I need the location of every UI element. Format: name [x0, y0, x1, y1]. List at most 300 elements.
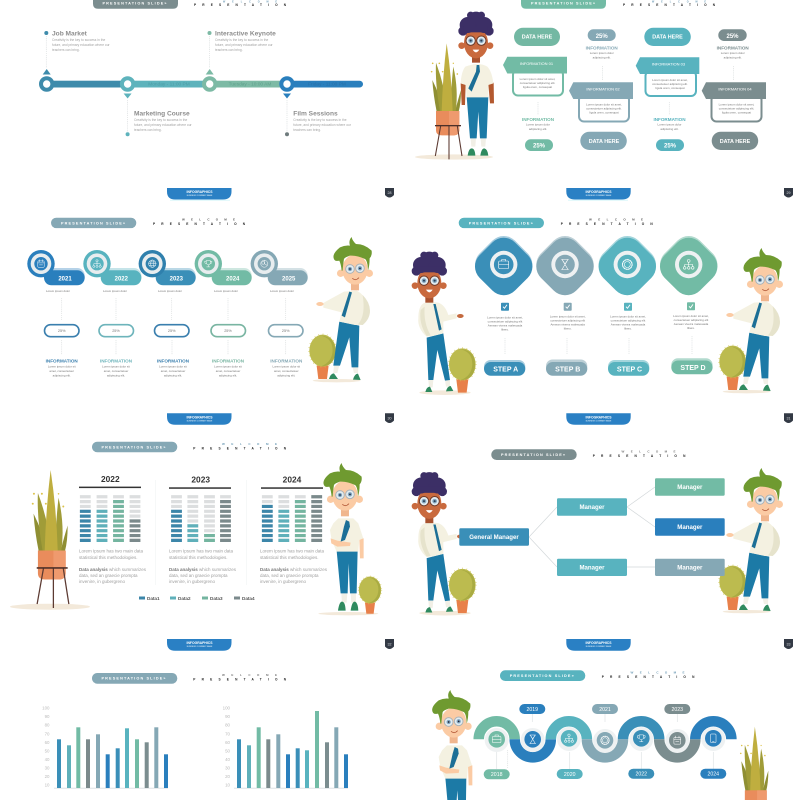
text: job market: teachers can bring.	[52, 48, 80, 52]
year 2021: INFORMATION	[46, 359, 78, 364]
footer tab: INFOGRAPHICS	[186, 190, 213, 194]
text: film sessions	[285, 110, 352, 136]
header pill	[521, 0, 606, 9]
bar chart left: 70	[45, 731, 50, 736]
year 2024: Lorem ipsum dolor	[214, 289, 238, 293]
block chart 2024: invenire, in gubergreno	[260, 579, 307, 584]
year 2024: INFORMATION	[212, 359, 245, 364]
year 2025: INFORMATION	[270, 359, 303, 364]
column 1: adipiscing elit.	[529, 127, 547, 131]
timeline nodes	[41, 78, 293, 90]
block chart 2022: invenire, in gubergreno	[79, 579, 126, 584]
year 2025: amet, consectetuer	[274, 369, 299, 373]
header pill	[51, 218, 136, 228]
welcome heading: WELCOME	[589, 218, 643, 222]
welcome heading	[194, 0, 287, 7]
year label 2021: 2021	[599, 707, 611, 713]
year 2023: 2023	[170, 277, 184, 283]
welcome heading	[193, 673, 287, 682]
block chart 2024	[260, 474, 328, 584]
page badge: 30	[388, 416, 392, 420]
page badge	[385, 639, 394, 649]
column 4: 25%	[726, 34, 739, 40]
illustration: green-haired character with cactus	[719, 468, 783, 613]
year 2024: adipiscing elit.	[219, 374, 237, 378]
welcome heading	[561, 218, 653, 226]
column 2: INFORMATION 02	[586, 87, 620, 92]
column 1	[503, 28, 567, 151]
bar chart right	[223, 706, 348, 788]
footer tab: INFOGRAPHICS	[586, 641, 612, 645]
bar chart left	[42, 706, 168, 788]
footer tab: BUSINESS COMPANY NAME	[187, 645, 213, 648]
welcome heading: PRESENTATION	[194, 3, 287, 7]
header pill: PRESENTATION SLIDE»	[531, 1, 595, 5]
illustration: small cactus	[359, 576, 381, 614]
column 2: DATA HERE	[589, 139, 620, 145]
welcome heading: PRESENTATION	[593, 454, 686, 458]
year 2022: Lorem ipsum dolor sit	[102, 365, 130, 369]
column 4: ligula orem, consequat	[722, 110, 751, 114]
bar chart right: 80	[225, 723, 231, 728]
box: manager lower: Manager	[579, 564, 605, 571]
year 2024: 2024	[226, 277, 240, 283]
block chart 2024: Data analysis which summarizes	[260, 567, 328, 572]
footer tab	[566, 639, 631, 651]
year 2025: Lorem ipsum dolor sit	[272, 365, 300, 369]
year 2025	[251, 250, 308, 378]
column 3: INFORMATION 03	[652, 62, 686, 67]
welcome heading: WELCOME	[630, 670, 684, 674]
bar chart left: 30	[45, 766, 50, 770]
footer tab	[566, 413, 631, 425]
block chart 2022: data, sed an graecie prompta	[79, 573, 138, 578]
bar chart left: 50	[45, 748, 50, 753]
block chart 2022: statistical this methodologies.	[79, 555, 138, 560]
year 2022: amet, consectetuer	[104, 369, 128, 373]
year 2025: Lorem ipsum dolor	[270, 289, 294, 293]
panel: slide 30 yearly timeline	[27, 200, 373, 382]
bar chart left: 80	[45, 723, 50, 728]
text: marketing course: Marketing Course	[134, 110, 190, 118]
step A: libero.	[501, 327, 509, 331]
illustration: green-haired character with cactus	[719, 248, 783, 393]
year 2021: adipiscing elit.	[53, 374, 71, 378]
column 2: consectetuer adipiscing elit.	[586, 106, 622, 110]
text: film sessions: future, and primary education where our	[293, 123, 352, 127]
year 2022: 2022	[115, 277, 129, 283]
step C: Aenean viverra malesuada	[611, 322, 646, 326]
footer tab: INFOGRAPHICS	[186, 641, 213, 645]
year label 2022: 2022	[636, 772, 647, 778]
text: film sessions: teachers can bring.	[293, 128, 321, 132]
year label 2022	[628, 769, 654, 779]
year label 2019	[519, 704, 545, 714]
year 2023: INFORMATION	[157, 359, 190, 364]
step B: libero.	[564, 326, 572, 330]
node 2021	[593, 729, 617, 753]
footer tab	[167, 188, 232, 200]
year 2025: 25%	[282, 329, 290, 333]
header pill	[491, 449, 577, 460]
illustration: plant with stool	[415, 43, 493, 160]
year 2024: amet, consectetuer	[216, 369, 240, 373]
block chart 2022	[79, 474, 147, 584]
wave band	[479, 721, 731, 757]
column 4	[702, 29, 766, 150]
box: manager right bottom	[655, 559, 725, 576]
year label 2018	[484, 769, 510, 779]
year 2021: 25%	[58, 329, 66, 333]
step A: Aenean viverra malesuada	[488, 323, 523, 327]
bar chart right: 30	[225, 766, 231, 770]
page badge: 33	[786, 642, 790, 646]
timeline bar: Friday - 11:00 PM	[308, 82, 346, 88]
block chart 2023: statistical this methodologies.	[169, 555, 228, 560]
text: interactive keynote: future, and primary education where our	[215, 43, 274, 47]
welcome heading: WELCOME	[223, 0, 277, 3]
column 2: 25%	[596, 34, 608, 40]
step A	[468, 229, 539, 376]
column 4: adipiscing elit.	[724, 55, 742, 59]
footer tab: BUSINESS COMPANY NAME	[187, 194, 213, 197]
panel: slide 28 timeline	[41, 0, 394, 200]
panel: slide 34 bar charts	[42, 639, 394, 788]
column 2: adipiscing elit.	[593, 55, 611, 59]
welcome heading	[193, 442, 287, 450]
column 3: 25%	[664, 143, 677, 149]
box: manager upper	[557, 498, 627, 516]
box: general manager	[459, 528, 529, 546]
welcome heading	[153, 218, 246, 226]
box: manager right top: Manager	[677, 484, 703, 491]
step B	[530, 229, 600, 376]
column 3	[636, 28, 699, 151]
column 4: INFORMATION	[717, 45, 749, 50]
column 1: Lorem ipsum dolor	[526, 122, 550, 126]
header pill: PRESENTATION SLIDE»	[61, 221, 125, 225]
text: film sessions: Creativity is the key to success in the	[293, 118, 347, 122]
bar chart left: 40	[45, 757, 50, 762]
step A: STEP A	[493, 366, 518, 374]
year label 2023: 2023	[672, 707, 683, 713]
timeline bar: Monday - 11:00 PM	[148, 82, 190, 88]
step D: Aenean viverra malesuada	[674, 322, 709, 326]
box: manager right middle: Manager	[677, 524, 703, 531]
bar chart right: 60	[225, 740, 231, 745]
column 4: DATA HERE	[720, 139, 751, 145]
block chart 2024: Lorem Ipsum has two main data	[260, 549, 325, 554]
text: marketing course: Creativity is the key to success in the	[134, 118, 187, 122]
year label 2020: 2020	[564, 772, 576, 778]
welcome heading: PRESENTATION	[193, 446, 287, 450]
step D: consectetuer adipiscing elit	[674, 318, 709, 322]
year 2023: Lorem ipsum dolor sit	[159, 365, 187, 369]
welcome heading: PRESENTATION	[623, 3, 716, 7]
footer tab: BUSINESS COMPANY NAME	[586, 194, 612, 197]
year label 2020	[557, 769, 583, 779]
step C	[592, 229, 663, 376]
legend: Data4	[242, 596, 255, 601]
year 2023: Lorem ipsum dolor	[158, 289, 182, 293]
panel: slide 32 yearly data columns	[10, 413, 394, 615]
page badge: 31	[786, 416, 790, 420]
welcome heading	[602, 670, 695, 679]
column 1: 25%	[533, 143, 546, 149]
welcome heading: PRESENTATION	[561, 222, 653, 226]
dotted remnant	[507, 750, 509, 768]
footer tab: BUSINESS COMPANY NAME	[586, 419, 612, 422]
year 2024: 25%	[224, 329, 232, 333]
illustration: standing green-haired character	[432, 690, 472, 800]
text: interactive keynote: Interactive Keynote	[215, 30, 276, 38]
illustration: standing character	[458, 12, 494, 156]
bar chart right: 70	[225, 731, 231, 736]
header pill: PRESENTATION SLIDE»	[501, 453, 565, 457]
column 4: consectetuer adipiscing elit.	[719, 106, 754, 110]
timeline bar: Tuesday - 10:00 AM	[229, 82, 271, 88]
year 2022: 25%	[112, 329, 120, 333]
text: film sessions: Film Sessions	[293, 110, 338, 118]
year 2025: 2025	[282, 277, 296, 283]
block chart 2024: data, sed an graecie prompta	[260, 573, 319, 578]
column 3: ligula orem, consequat	[655, 86, 685, 90]
header pill: PRESENTATION SLIDE»	[469, 221, 533, 225]
node 2019	[521, 728, 545, 752]
header pill: PRESENTATION SLIDE»	[102, 677, 166, 681]
column 2: Lorem ipsum dolor	[590, 51, 614, 55]
page badge	[385, 413, 394, 423]
column 2: ligula orem, consequat	[589, 110, 619, 114]
box: manager upper: Manager	[579, 504, 605, 511]
welcome heading: PRESENTATION	[153, 222, 246, 226]
welcome heading: WELCOME	[652, 0, 706, 3]
block chart 2022: 2022	[101, 474, 120, 484]
text: marketing course: teachers can bring.	[134, 128, 162, 132]
text: interactive keynote: teachers can bring.	[215, 48, 243, 52]
year 2022: INFORMATION	[100, 359, 133, 364]
legend: Data1	[147, 596, 160, 601]
step C: STEP C	[617, 366, 642, 374]
page badge: 29	[786, 191, 790, 195]
block chart 2022: Data analysis which summarizes	[79, 567, 147, 572]
step D: Lorem ipsum dolor sit amet,	[673, 314, 709, 318]
column 1: INFORMATION 01	[520, 61, 554, 66]
block chart 2024: statistical this methodologies.	[260, 555, 319, 560]
text: job market	[44, 30, 111, 52]
column 1: Lorem ipsum dolor sit amet,	[520, 77, 556, 81]
text: marketing course	[126, 110, 193, 136]
year 2021: amet, consectetuer	[49, 369, 74, 373]
footer shadow strip	[568, 200, 628, 201]
step D: libero.	[687, 326, 695, 330]
column 1: INFORMATION	[522, 117, 555, 122]
year 2023: 25%	[168, 329, 176, 333]
step C: consectetuer adipiscing elit	[611, 318, 646, 322]
bar chart right: 10	[225, 783, 231, 788]
bar chart left: 90	[45, 714, 50, 719]
page badge	[784, 639, 793, 649]
step A: consectetuer adipiscing elit	[488, 319, 523, 323]
text: interactive keynote: Creativity is the key to success in the	[215, 38, 268, 42]
bar chart right: 90	[225, 714, 231, 719]
column 2: INFORMATION	[586, 45, 618, 50]
illustration: dark-haired character with cactus	[412, 472, 476, 615]
connector lines	[529, 487, 655, 567]
welcome heading: WELCOME	[182, 218, 235, 222]
footer tab: BUSINESS COMPANY NAME	[187, 419, 213, 422]
box: manager right top	[655, 478, 725, 496]
step B: STEP B	[555, 366, 580, 374]
column 2: Lorem ipsum dolor sit amet,	[586, 102, 622, 106]
year 2022: Lorem ipsum dolor	[103, 289, 127, 293]
year 2021: Lorem ipsum dolor sit	[48, 365, 76, 369]
header pill: PRESENTATION SLIDE»	[102, 445, 166, 449]
column 3: INFORMATION	[653, 117, 686, 122]
year label 2018: 2018	[491, 772, 503, 778]
header pill	[93, 0, 178, 9]
step D	[653, 229, 724, 374]
bar chart right: 40	[225, 757, 231, 762]
bar chart right: 50	[225, 748, 231, 753]
welcome heading	[593, 449, 686, 458]
bar chart right: 20	[225, 774, 231, 779]
text: job market: Job Market	[52, 30, 88, 38]
year 2022	[83, 250, 141, 378]
step B: consectetuer adipiscing elit	[550, 318, 585, 322]
illustration: dark-haired character with cactus	[412, 252, 476, 395]
year label 2021	[592, 704, 618, 714]
block chart 2023: invenire, in gubergreno	[169, 579, 216, 584]
node 2022	[629, 727, 653, 751]
year 2021: Lorem ipsum dolor	[46, 289, 70, 293]
welcome heading: PRESENTATION	[193, 678, 287, 682]
block chart 2023	[169, 474, 237, 584]
box: manager lower	[557, 559, 627, 576]
node 2023	[665, 729, 689, 753]
connectors	[497, 714, 713, 769]
year label 2019: 2019	[527, 707, 538, 713]
block chart 2023: Data analysis which summarizes	[169, 567, 237, 572]
panel: slide 29 information blocks	[415, 0, 793, 200]
block chart 2023: 2023	[191, 474, 210, 484]
timeline bar	[46, 81, 363, 88]
step B: Lorem ipsum dolor sit amet,	[550, 314, 586, 318]
column 3: Lorem ipsum dolor	[658, 122, 681, 126]
panel: slide 35 wave timeline	[432, 639, 793, 800]
box: general manager: General Manager	[469, 534, 519, 541]
text: job market: Creativity is the key to success in the	[52, 38, 105, 42]
footer tab: INFOGRAPHICS	[586, 190, 612, 194]
year 2025: adipiscing elit.	[277, 374, 296, 378]
footer tab	[566, 188, 631, 200]
bar chart left: 20	[45, 774, 50, 779]
node 2024	[701, 727, 725, 751]
year 2024: Lorem ipsum dolor sit	[214, 365, 242, 369]
step A: Lorem ipsum dolor sit amet,	[487, 315, 523, 319]
node 2018	[485, 728, 509, 752]
column 4: INFORMATION 04	[718, 87, 752, 92]
column 1: consectetuer adipiscing elit.	[520, 81, 555, 85]
column 3: Lorem ipsum dolor sit amet,	[652, 78, 688, 82]
legend: Data3	[210, 596, 223, 601]
welcome heading: WELCOME	[222, 442, 277, 446]
illustration: plant with stool	[10, 470, 90, 610]
illustration: standing green-haired character	[318, 463, 378, 615]
footer tab	[167, 413, 232, 425]
illustration: plant	[740, 727, 768, 800]
page badge	[385, 188, 394, 198]
bar chart left: 100	[42, 706, 50, 711]
column dividers	[155, 480, 247, 585]
year label 2024: 2024	[708, 772, 719, 778]
header pill	[92, 673, 177, 684]
column 3: adipiscing elit.	[660, 127, 679, 131]
bar chart left: 60	[45, 740, 50, 745]
marker triangles	[43, 36, 291, 132]
year label 2023	[664, 704, 690, 714]
header pill	[459, 218, 544, 228]
step B: Aenean viverra malesuada	[551, 322, 585, 326]
year 2023	[139, 250, 196, 378]
welcome heading: PRESENTATION	[602, 675, 695, 679]
bar chart right: 100	[223, 706, 231, 711]
box: manager right middle	[655, 518, 725, 536]
footer shadow strip	[170, 200, 230, 201]
header pill: PRESENTATION SLIDE»	[510, 674, 574, 678]
header pill	[92, 442, 177, 452]
footer tab: INFOGRAPHICS	[586, 415, 612, 419]
text: job market: future, and primary education where our	[52, 43, 111, 47]
block chart 2023: data, sed an graecie prompta	[169, 573, 228, 578]
year label 2024	[700, 769, 726, 779]
welcome heading: WELCOME	[622, 449, 676, 453]
step C: Lorem ipsum dolor sit amet,	[610, 314, 646, 318]
column 2	[569, 29, 633, 150]
welcome heading	[623, 0, 716, 7]
column 3: consectetuer adipiscing elit.	[652, 82, 688, 86]
node 2020	[557, 727, 581, 751]
header pill: PRESENTATION SLIDE»	[102, 1, 166, 5]
block chart 2022: Lorem Ipsum has two main data	[79, 549, 144, 554]
header pill	[500, 670, 585, 681]
text: marketing course: future, and primary education where our	[134, 123, 193, 127]
welcome heading: WELCOME	[222, 673, 277, 677]
year 2024	[195, 250, 252, 378]
column 1: DATA HERE	[522, 35, 553, 41]
footer tab	[167, 639, 232, 651]
column 3: DATA HERE	[652, 35, 683, 41]
block chart 2023: Lorem Ipsum has two main data	[169, 549, 234, 554]
text: interactive keynote	[208, 30, 276, 52]
year 2022: adipiscing elit.	[107, 374, 125, 378]
page badge	[784, 188, 793, 198]
column 1: ligula orem, consequat	[523, 85, 552, 89]
legend	[139, 596, 255, 601]
illustration: green-haired character with cactus	[309, 237, 373, 382]
page badge	[784, 413, 793, 423]
page badge: 32	[388, 642, 392, 646]
step D: STEP D	[680, 365, 706, 372]
step C: libero.	[624, 326, 632, 330]
page badge: 28	[388, 191, 392, 195]
footer tab: BUSINESS COMPANY NAME	[586, 645, 612, 648]
legend: Data2	[178, 596, 191, 601]
panel: slide 31 steps	[412, 200, 783, 395]
year 2021: 2021	[58, 277, 72, 283]
box: manager right bottom: Manager	[677, 564, 703, 571]
block chart 2024: 2024	[283, 474, 302, 484]
